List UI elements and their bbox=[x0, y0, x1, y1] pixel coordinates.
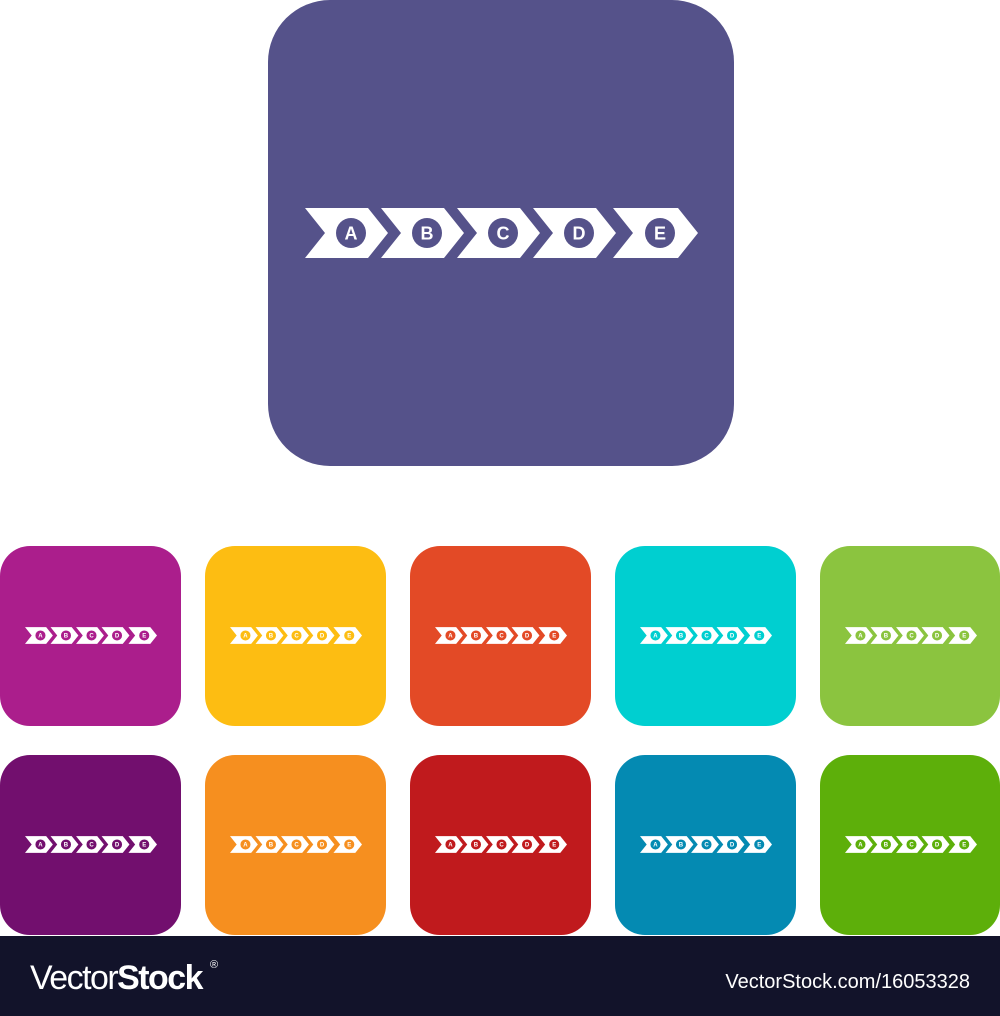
main tile bbox=[268, 0, 734, 466]
footer url: VectorStock.com/16053328 bbox=[725, 971, 970, 993]
tile: purple bbox=[0, 755, 181, 935]
main arrow row A-E bbox=[305, 208, 698, 258]
registered mark: ® bbox=[210, 959, 218, 971]
tile: orange bbox=[205, 755, 386, 935]
tile: yellow bbox=[205, 546, 386, 726]
tile: cyan bbox=[615, 546, 796, 726]
tile: magenta bbox=[0, 546, 181, 726]
tile: green bbox=[820, 755, 1000, 935]
tile: dark red bbox=[410, 755, 591, 935]
footer logo: VectorStock bbox=[30, 959, 204, 997]
tile: light green bbox=[820, 546, 1000, 726]
footer bar bbox=[0, 936, 1000, 1016]
tile: blue bbox=[615, 755, 796, 935]
tile: red-orange bbox=[410, 546, 591, 726]
